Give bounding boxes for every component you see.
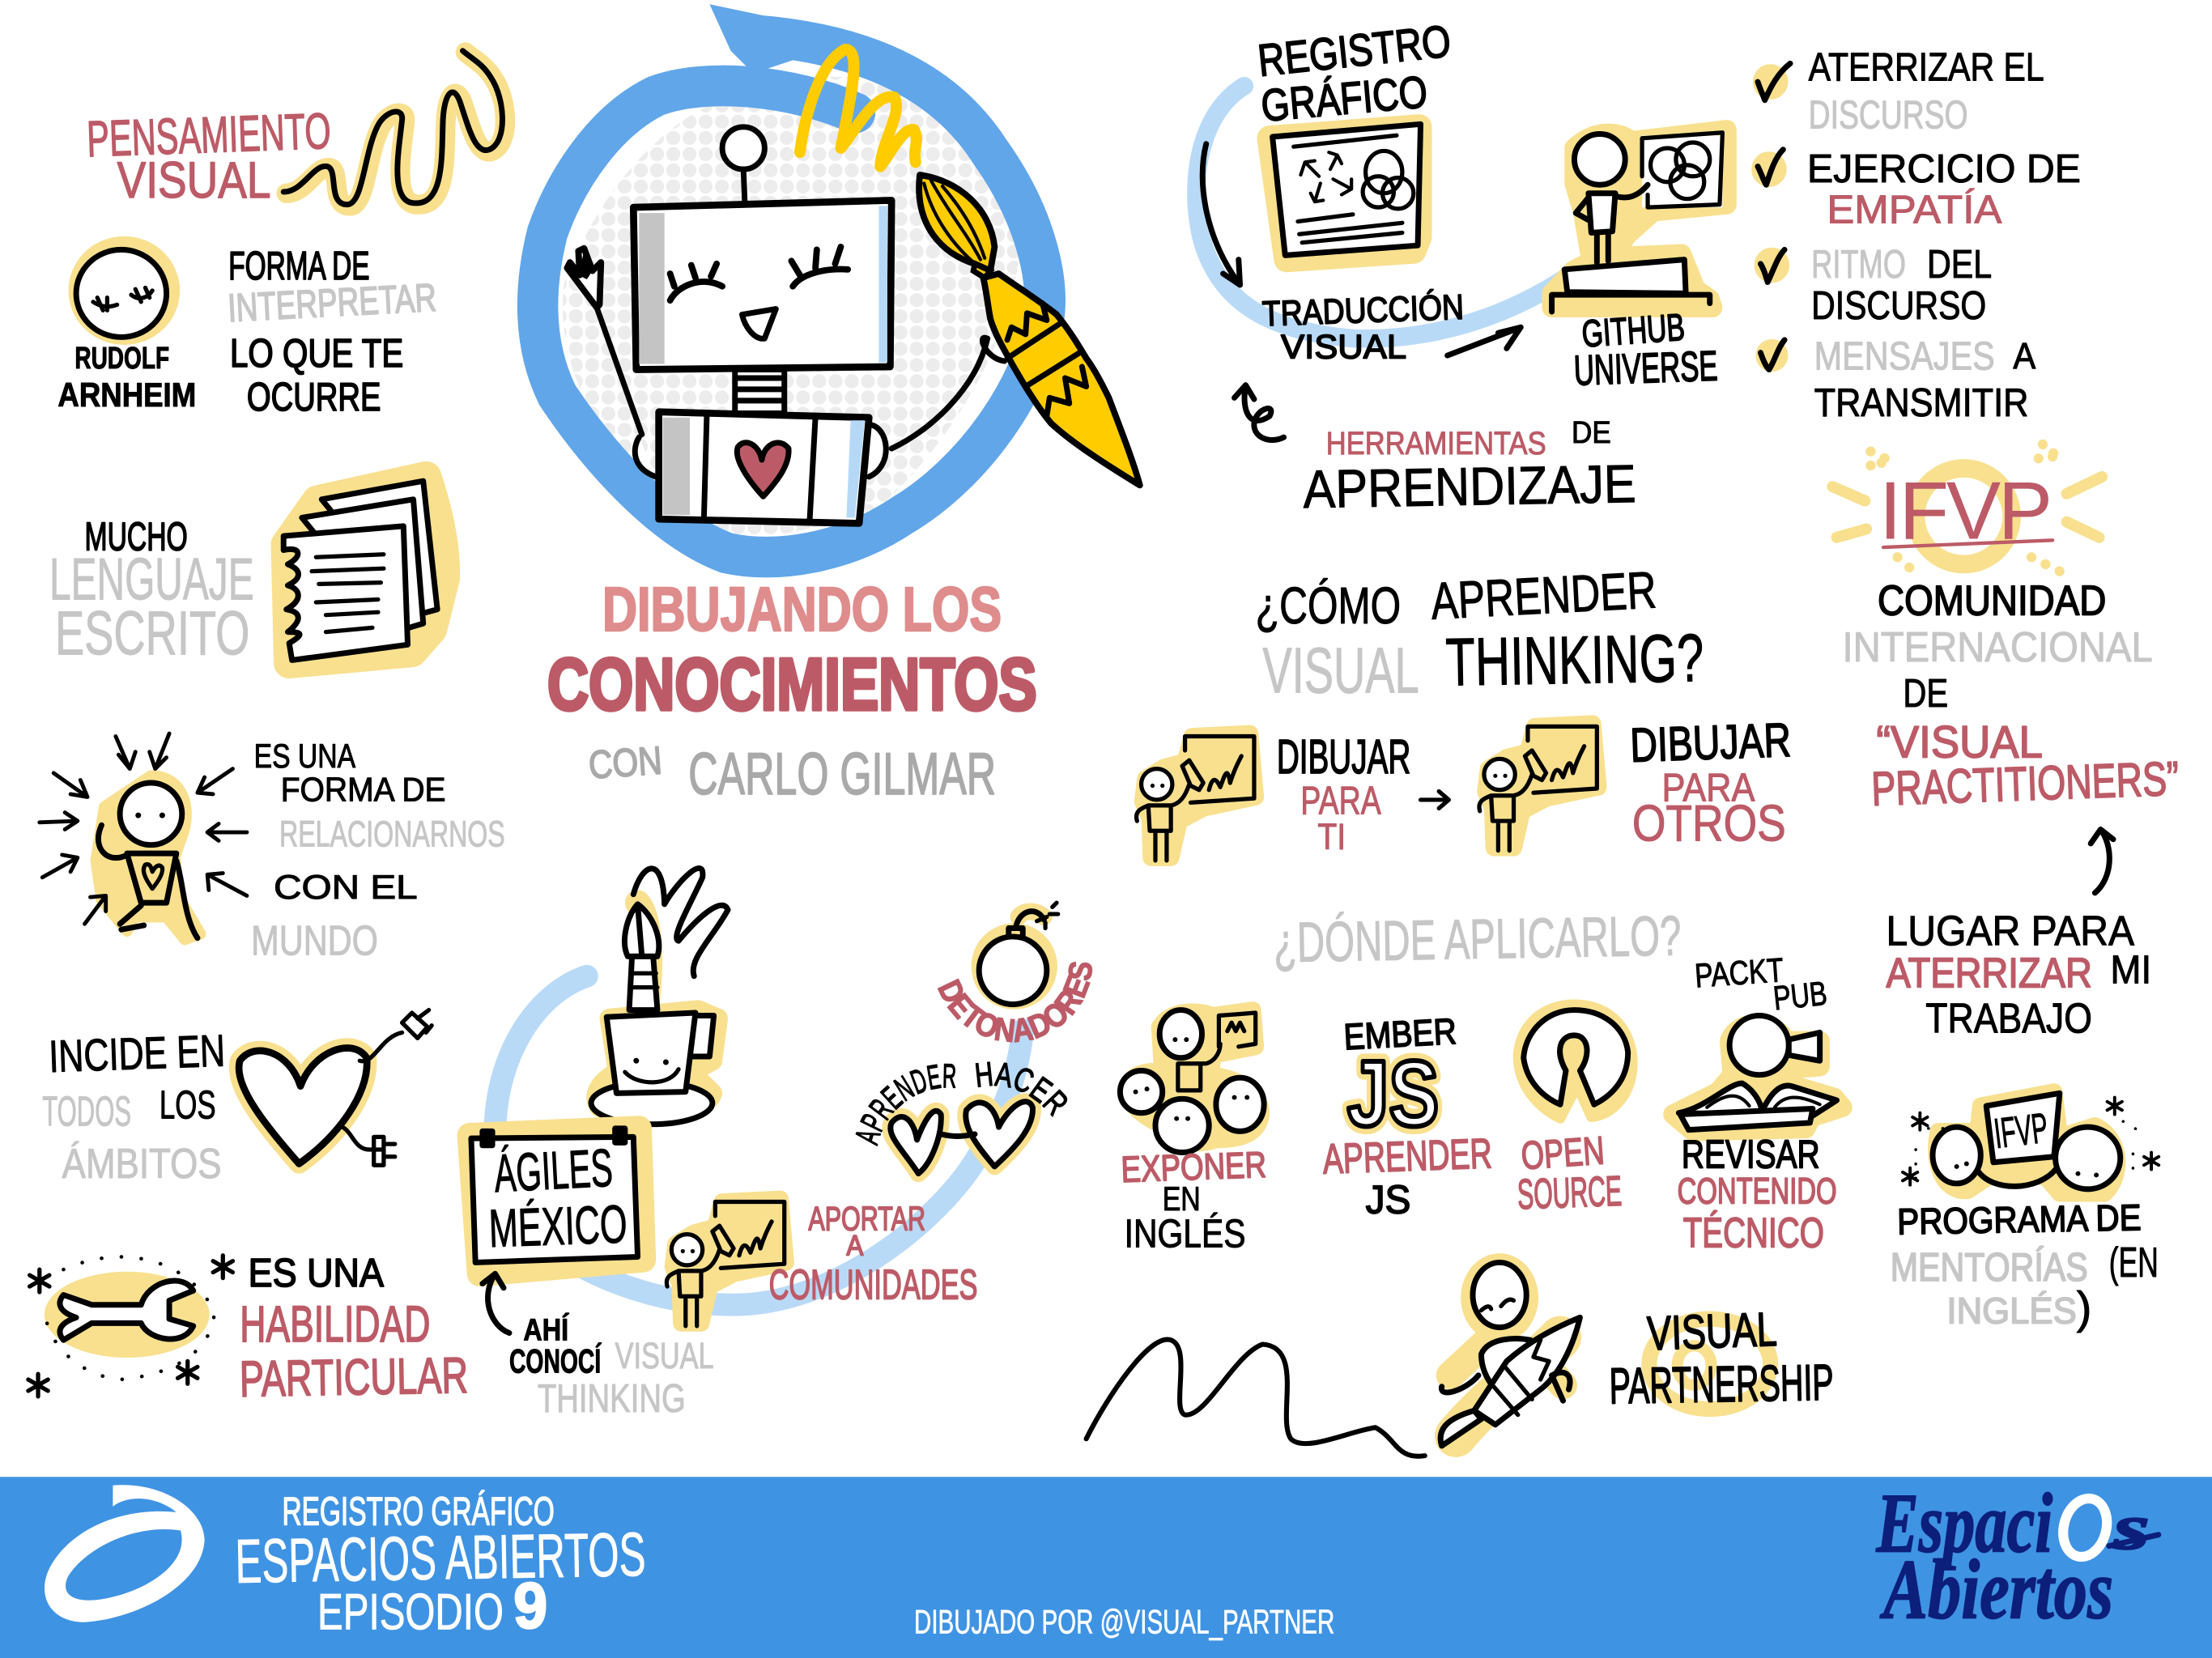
text: incide en todos los ambitos: ÁMBITOS — [62, 1141, 222, 1188]
icon: person drawing for others — [1479, 724, 1598, 851]
text: exponer en inglés: EXPONER — [1121, 1144, 1267, 1190]
icon: person drawing on board — [666, 1199, 785, 1326]
text: episode — [235, 1490, 646, 1642]
text: detonadores: DETONADORES — [938, 962, 1093, 1043]
icon: person with arrows — [40, 733, 247, 939]
text: episode: 9 — [513, 1569, 547, 1642]
dotted background — [563, 77, 1019, 538]
text: forma de interpretar: OCURRE — [247, 376, 381, 419]
icon: reader with open book — [1673, 1016, 1843, 1131]
body with heart — [635, 412, 886, 523]
text: checklist: DISCURSO — [1809, 94, 1968, 138]
text: comunidad internacional: “VISUAL — [1876, 717, 2043, 767]
text: es una habilidad particular: ES UNA — [249, 1252, 384, 1295]
icon: mentoring program: IFVP — [1992, 1105, 2051, 1158]
squiggle line — [1087, 1340, 1425, 1456]
yellow scribble — [800, 49, 917, 167]
text: comunidad internacional: INTERNACIONAL — [1843, 624, 2153, 671]
text: forma de interpretar: INTERPRETAR — [227, 276, 437, 330]
text: ahí conocí visual thinking — [509, 1312, 714, 1421]
text: mucho lenguaje escrito — [49, 516, 254, 668]
text: aprender js: JS — [1366, 1178, 1410, 1222]
text: es una forma de relacionarnos: MUNDO — [251, 918, 378, 965]
text: visual partnership: PARTNERSHIP — [1609, 1354, 1834, 1415]
text: traducción visual: TRADUCCIÓN — [1261, 287, 1465, 334]
text: lugar para aterrizar mi trabajo — [1887, 908, 2151, 1042]
arrow: down to translation — [1202, 144, 1240, 285]
text: programa de mentorías: (EN — [2109, 1239, 2159, 1286]
text: programa de mentorías — [1891, 1197, 2159, 1331]
text: forma de interpretar: LO QUE TE — [230, 332, 403, 376]
text: exponer en inglés — [1121, 1144, 1267, 1256]
text: comunidad internacional: DE — [1903, 672, 1948, 716]
title: CARLO GILMAR — [688, 741, 996, 807]
text: checklist: DEL — [1927, 243, 1992, 287]
title: DIBUJANDO LOS — [602, 576, 1002, 644]
text: aprender: APRENDER — [855, 1064, 955, 1146]
text: ahí conocí visual thinking: CONOCÍ — [509, 1341, 602, 1380]
icon: Ágiles México sign: MÉXICO — [488, 1194, 628, 1259]
heading: dónde aplicarlo: ¿DÓNDE APLICARLO? — [1273, 904, 1682, 974]
logo: IFVP sun — [1832, 444, 2102, 576]
head — [633, 200, 891, 370]
antenna — [722, 127, 764, 205]
text: registro gráfico: REGISTRO — [1256, 15, 1453, 86]
logo: Espacios Abiertos: Espaci — [1876, 1477, 2052, 1571]
icon: Ágiles México sign — [470, 1125, 644, 1273]
community arc — [496, 976, 1023, 1305]
decorative at-sign behind partnership — [1649, 1319, 1771, 1409]
text: dibujar para otros — [1629, 712, 1792, 852]
text: registro gráfico: GRÁFICO — [1259, 66, 1429, 131]
text: packt pub: PUB — [1772, 974, 1829, 1017]
title: CON — [587, 739, 663, 788]
text: programa de mentorías: MENTORÍAS — [1891, 1246, 2088, 1290]
text: traducción visual — [1261, 287, 1465, 366]
text: aprender js: APRENDER — [1322, 1130, 1493, 1184]
text: open source: SOURCE — [1516, 1168, 1623, 1218]
icon: speaker on podium — [1552, 130, 1727, 312]
icon: hearts — [891, 1102, 1032, 1174]
text: checklist: A — [2013, 335, 2036, 376]
text: programa de mentorías: INGLÉS — [1946, 1290, 2077, 1331]
text: dibujar para otros: PARA — [1661, 767, 1755, 810]
text: dibujar para ti: TI — [1317, 816, 1346, 857]
text: checklist: RITMO — [1811, 243, 1906, 287]
text: packt pub — [1694, 950, 1829, 1017]
checklist icons — [1752, 63, 1790, 371]
text: dibujar para ti — [1277, 729, 1410, 857]
text: aportar a comunidades: APORTAR — [808, 1199, 925, 1237]
text: dibujar para otros: DIBUJAR — [1629, 712, 1792, 772]
text: Rudolf Arnheim — [57, 341, 196, 414]
text: checklist: ATERRIZAR EL — [1809, 45, 2044, 89]
text: incide en todos los ambitos: TODOS — [42, 1088, 131, 1135]
text: packt pub: PACKT — [1694, 950, 1784, 995]
text: dibujar para ti: PARA — [1300, 779, 1381, 823]
icon: bomb — [972, 903, 1058, 1009]
closing parenthesis: ) — [2077, 1282, 2091, 1333]
right arm — [891, 338, 1005, 449]
text: visual partnership: VISUAL — [1646, 1302, 1778, 1360]
heading: cómo aprender visual thinking: THINKING? — [1445, 619, 1704, 700]
icon: heart with plug — [239, 1010, 432, 1165]
text: pensamiento visual: VISUAL — [117, 152, 271, 209]
text: mucho lenguaje escrito: LENGUAJE — [49, 546, 254, 613]
text: dibujar para ti: DIBUJAR — [1277, 729, 1410, 784]
text: exponer en inglés: EN — [1163, 1180, 1201, 1218]
heading: cómo aprender visual thinking — [1256, 560, 1704, 707]
text: ember: EMBER — [1342, 1010, 1457, 1057]
text: forma de interpretar — [227, 244, 437, 419]
text: github universe: GITHUB — [1580, 305, 1686, 355]
icon: graphic record sheet — [1270, 124, 1421, 260]
text: es una forma de relacionarnos: RELACIONARNOS — [279, 813, 505, 854]
text: revisar contenido técnico: REVISAR — [1682, 1133, 1820, 1177]
paintbrush — [919, 175, 1140, 485]
title — [547, 576, 1037, 807]
text: mucho lenguaje escrito: ESCRITO — [55, 599, 249, 668]
text: Rudolf Arnheim: ARNHEIM — [57, 376, 196, 414]
logo: Espacios Abiertos — [1876, 1477, 2159, 1637]
text: revisar contenido técnico — [1678, 1133, 1837, 1256]
arrow: curl up — [1235, 385, 1284, 440]
heading: cómo aprender visual thinking: APRENDER — [1429, 560, 1658, 631]
text: incide en todos los ambitos: LOS — [160, 1084, 216, 1128]
text: lugar para aterrizar mi trabajo: MI — [2111, 948, 2151, 992]
text: Rudolf Arnheim: RUDOLF — [74, 341, 169, 376]
icon: squiggle — [283, 51, 505, 206]
text: incide en todos los ambitos: INCIDE EN — [48, 1026, 226, 1082]
text: es una habilidad particular: PARTICULAR — [239, 1347, 469, 1408]
text: herramientas de aprendizaje: APRENDIZAJE — [1303, 454, 1636, 520]
credit: DIBUJADO POR @VISUAL_PARTNER — [914, 1603, 1334, 1641]
icon: open source — [1518, 1005, 1633, 1119]
text: visual partnership — [1609, 1302, 1834, 1415]
text: lugar para aterrizar mi trabajo: ATERRIZAR — [1887, 950, 2092, 997]
text: pensamiento visual — [86, 103, 332, 209]
text: ahí conocí visual thinking: THINKING — [538, 1377, 686, 1421]
text: comunidad internacional: COMUNIDAD — [1878, 578, 2106, 625]
text: herramientas de aprendizaje: DE — [1572, 415, 1611, 450]
icon: Rudolf Arnheim face — [69, 237, 179, 344]
text: traducción visual: VISUAL — [1281, 328, 1406, 366]
text: aportar a comunidades: A — [846, 1231, 864, 1262]
icon: group of people — [1120, 1010, 1264, 1153]
title: CONOCIMIENTOS — [547, 644, 1037, 725]
heading: cómo aprender visual thinking: ¿CÓMO — [1256, 576, 1401, 635]
illustration: robot with paintbrush — [538, 4, 1140, 557]
text: aprender js — [1322, 1130, 1493, 1222]
text: es una habilidad particular — [239, 1252, 469, 1408]
logo: white ring — [45, 1485, 205, 1622]
logo: Espacios Abiertos: Abiertos — [1879, 1543, 2113, 1637]
text: checklist: MENSAJES — [1814, 335, 1995, 379]
text: herramientas de aprendizaje: HERRAMIENTAS — [1326, 426, 1546, 461]
icon: wrench with sparks — [28, 1256, 232, 1397]
icon: stack of papers — [283, 477, 445, 663]
text: dibujar para otros: OTROS — [1632, 795, 1786, 852]
text: episode: EPISODIO — [317, 1584, 504, 1640]
icon: JS logo: JS — [1347, 1042, 1439, 1146]
text: episode: ESPACIOS ABIERTOS — [235, 1520, 646, 1596]
text: open source — [1516, 1129, 1623, 1218]
icon: cup with brush — [591, 868, 728, 1124]
text: github universe: UNIVERSE — [1573, 342, 1718, 395]
text: revisar contenido técnico: TÉCNICO — [1683, 1209, 1824, 1256]
text: episode: REGISTRO GRÁFICO — [282, 1490, 555, 1534]
icon: mentoring program — [1903, 1092, 2159, 1193]
blue brush ring — [538, 4, 1045, 557]
text: ahí conocí visual thinking: VISUAL — [615, 1335, 714, 1376]
arrow: to Github — [1448, 327, 1521, 355]
text: es una forma de relacionarnos: ES UNA — [254, 737, 355, 775]
flow arc — [1196, 86, 1629, 338]
icon: JS logo: JS — [1347, 1042, 1439, 1146]
text: github universe — [1573, 305, 1718, 395]
arrow: up to community — [2091, 830, 2113, 893]
text: es una forma de relacionarnos: CON EL — [274, 868, 418, 906]
left arm and hand — [567, 249, 642, 435]
logo: Espacios Abiertos: s — [2112, 1492, 2150, 1563]
neck — [735, 370, 785, 414]
logo: IFVP sun: IFVP — [1879, 466, 2052, 557]
text: lugar para aterrizar mi trabajo: LUGAR PARA — [1887, 908, 2134, 954]
text: es una forma de relacionarnos — [251, 737, 505, 965]
text: checklist — [1807, 45, 2081, 425]
text: exponer en inglés: INGLÉS — [1125, 1212, 1245, 1256]
text: programa de mentorías: PROGRAMA DE — [1897, 1197, 2142, 1243]
text: pensamiento visual: PENSAMIENTO — [86, 103, 332, 168]
text: es una habilidad particular: HABILIDAD — [240, 1296, 430, 1353]
icon: person riding paintbrush — [1440, 1254, 1580, 1446]
text: open source: OPEN — [1520, 1129, 1606, 1178]
text: checklist: EMPATÍA — [1827, 188, 2002, 232]
text: comunidad internacional — [1843, 578, 2180, 816]
text: herramientas de aprendizaje — [1303, 415, 1636, 520]
text: aportar a comunidades — [769, 1199, 977, 1309]
icon: person drawing for you — [1137, 733, 1256, 861]
text: forma de interpretar: FORMA DE — [228, 244, 369, 288]
text: revisar contenido técnico: CONTENIDO — [1678, 1170, 1837, 1211]
text: incide en todos los ambitos — [42, 1026, 226, 1188]
arrow: between drawers — [1421, 791, 1448, 808]
text: checklist: EJERCICIO DE — [1807, 147, 2081, 191]
text: registro gráfico — [1256, 15, 1453, 131]
text: lugar para aterrizar mi trabajo: TRABAJO — [1925, 995, 2092, 1042]
text: aportar a comunidades: COMUNIDADES — [769, 1262, 977, 1309]
arrow: to Ágiles — [483, 1273, 509, 1333]
text: mucho lenguaje escrito: MUCHO — [85, 516, 188, 559]
heading: cómo aprender visual thinking: VISUAL — [1262, 634, 1419, 707]
text: hacer: HACER — [975, 1061, 1067, 1117]
text: checklist: TRANSMITIR — [1814, 381, 2028, 425]
footer band — [0, 1477, 2212, 1658]
text: es una forma de relacionarnos: FORMA DE — [281, 771, 446, 809]
text: checklist: DISCURSO — [1811, 284, 1986, 328]
icon: Ágiles México sign: ÁGILES — [492, 1138, 615, 1204]
text: ahí conocí visual thinking: AHÍ — [523, 1312, 569, 1347]
